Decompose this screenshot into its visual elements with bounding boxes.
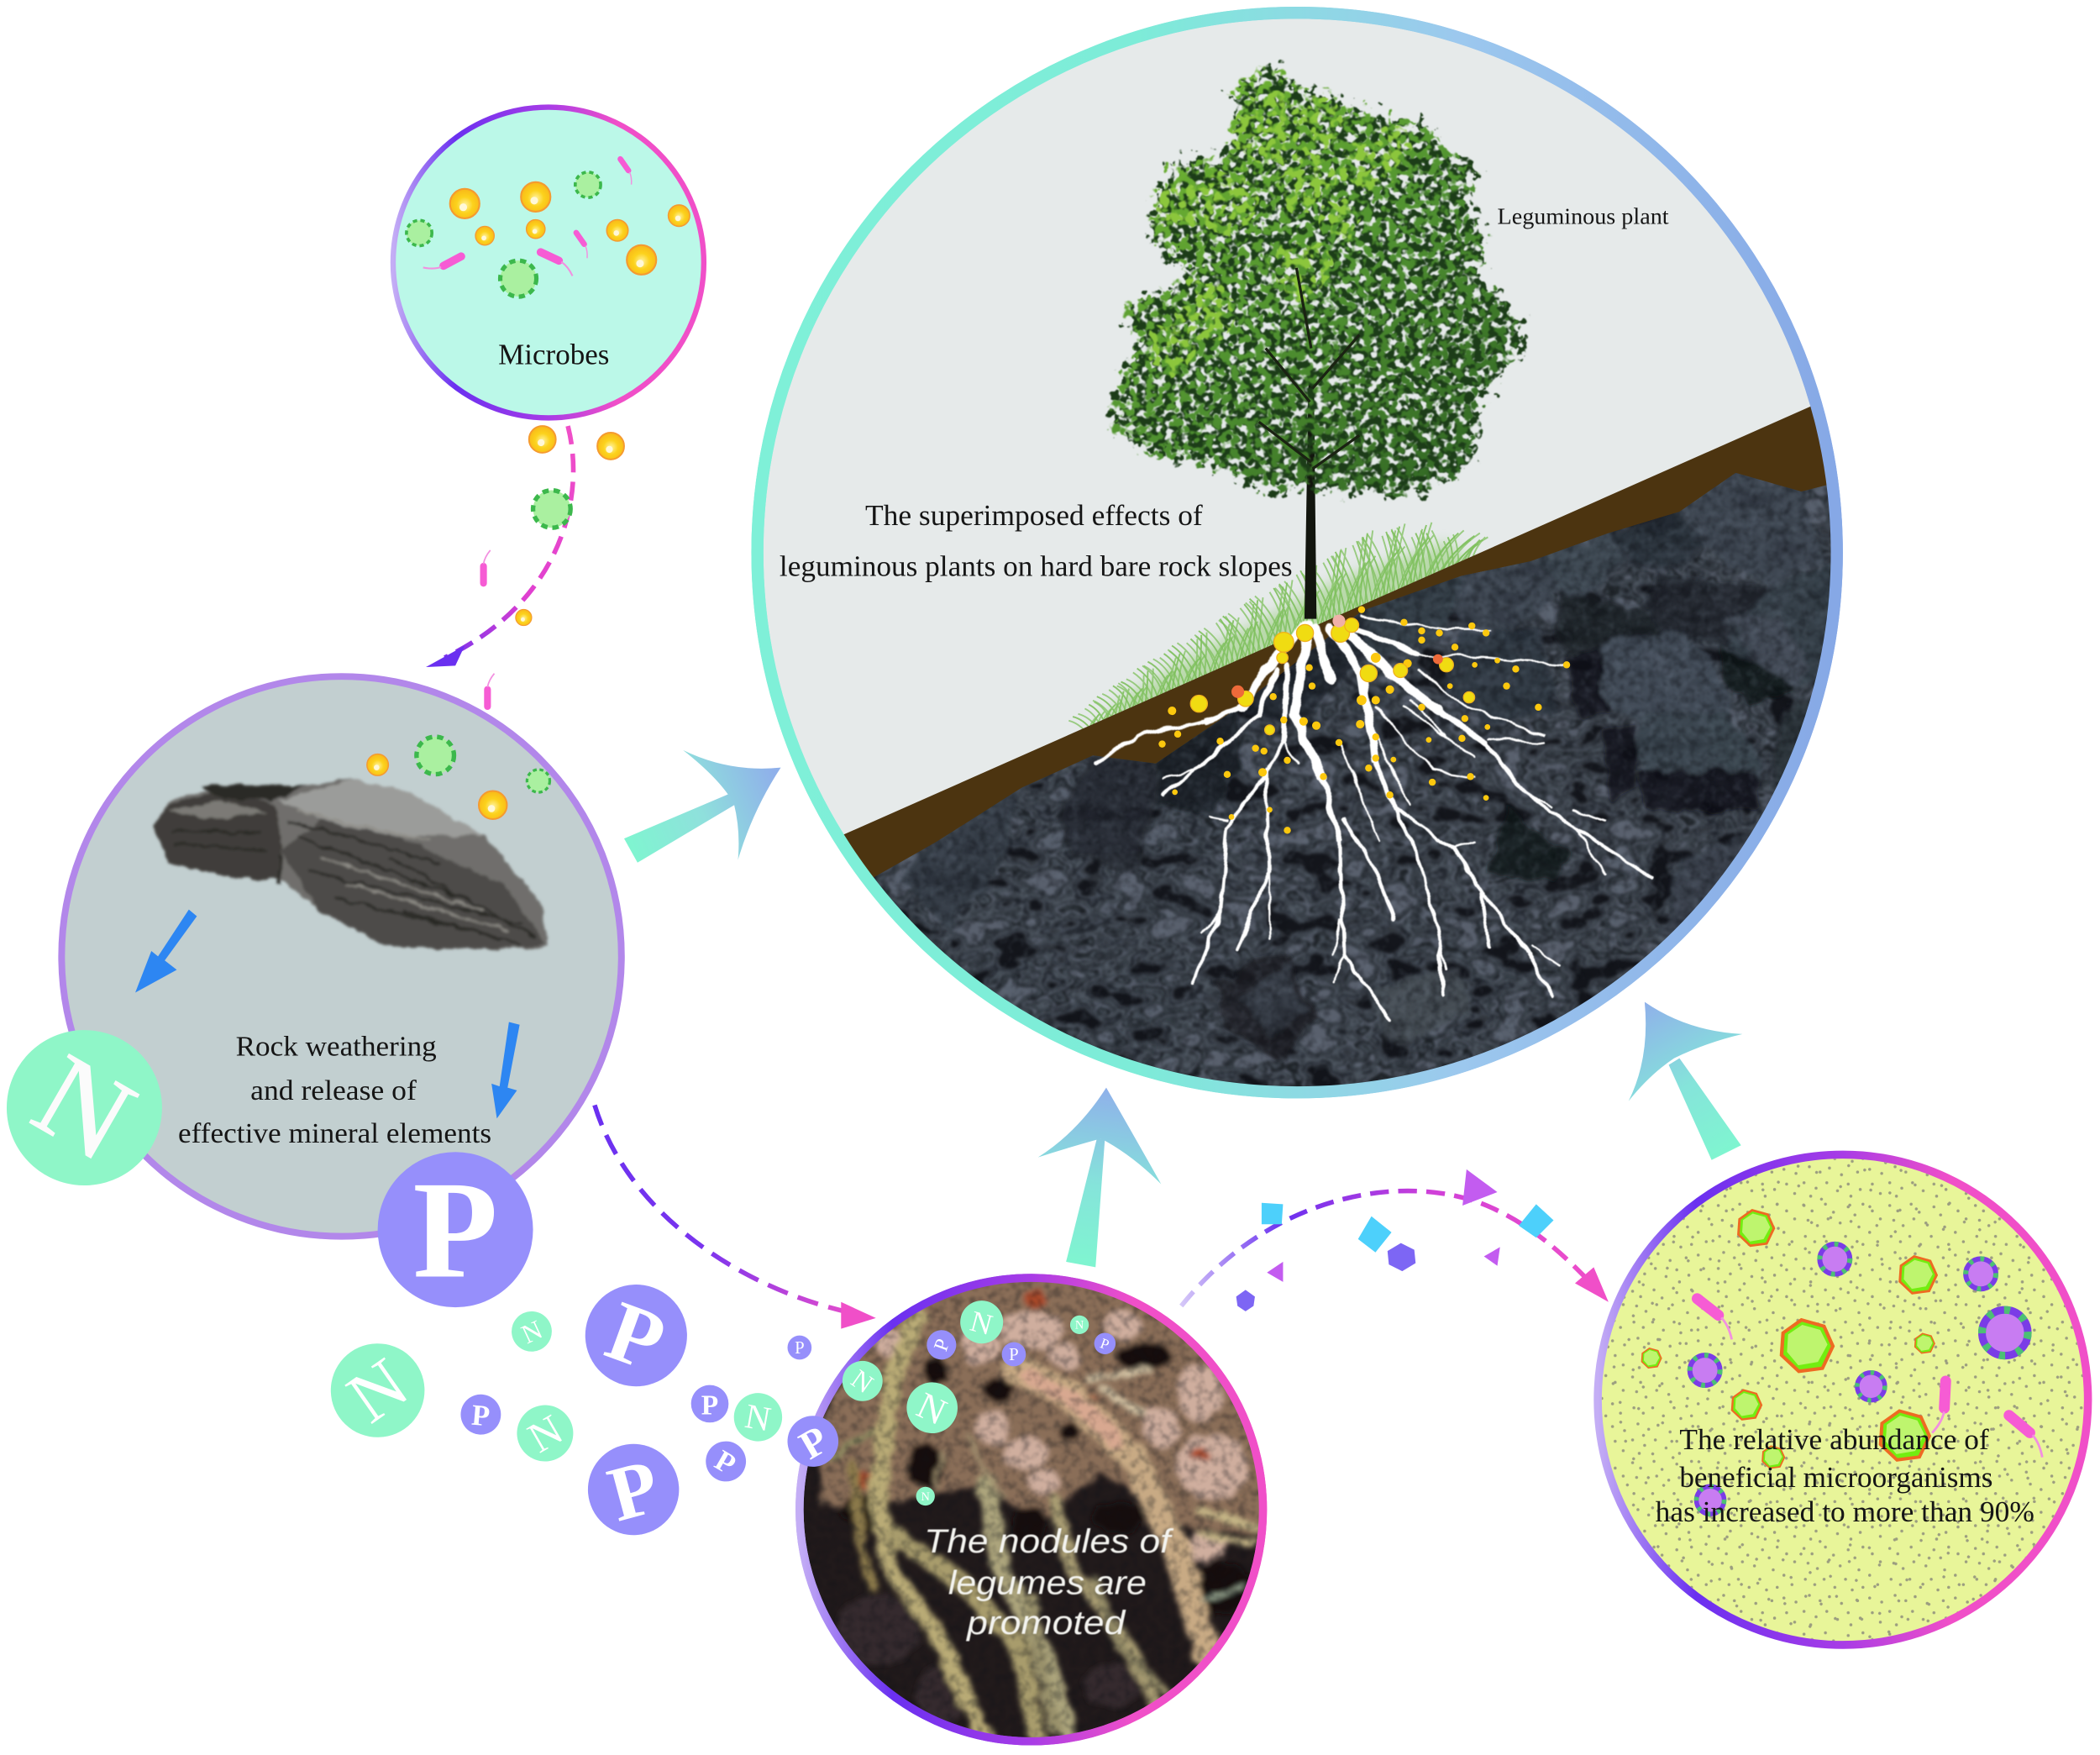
- label: rock weathering: Rock weathering: [236, 1031, 437, 1062]
- label: nodules promoted: [924, 1523, 1174, 1642]
- nutrient N medium: N: [521, 1406, 571, 1463]
- nodules photo texture: [820, 1276, 1270, 1742]
- label: relative abundance: has increased to more than 90%: [1656, 1495, 2034, 1528]
- nutrient P at nodule edge: P: [792, 1417, 836, 1469]
- heading: superimposed effects: The superimposed effects of: [865, 499, 1203, 532]
- heading: superimposed effects: [780, 499, 1293, 583]
- panel: rock weathering circle: [61, 676, 622, 1237]
- label: microbes: Microbes: [498, 339, 609, 371]
- nutrient N large: N: [333, 1343, 422, 1438]
- nutrient N large: [312, 1325, 443, 1456]
- floating N and P nutrients: [312, 1270, 1119, 1545]
- nutrient P in nodule right: P: [1009, 1346, 1019, 1364]
- nutrient N in nodule: N: [967, 1305, 996, 1342]
- nutrient P small: [459, 1393, 502, 1437]
- label: nodules promoted: The nodules of: [924, 1523, 1174, 1560]
- grass along the slope: [1068, 523, 1488, 734]
- nutrient P small mid: P: [701, 1390, 718, 1421]
- nutrient P small tilted: P: [710, 1443, 742, 1481]
- rock: released microbes: [367, 737, 549, 819]
- purple ringed microbes: [1690, 1244, 2028, 1514]
- arrow: dashed nodules to microorganisms: [1181, 1191, 1609, 1306]
- nutrient N at nodule edge: [834, 1353, 890, 1409]
- nutrient badge: phosphorus: P: [412, 1152, 498, 1306]
- nutrient P small tilted: [698, 1434, 753, 1489]
- panel: nodules photo circle: [797, 1273, 1270, 1748]
- arrow: nodules to main circle: [1038, 1088, 1161, 1267]
- nutrient N small: N: [517, 1315, 547, 1349]
- microbes: green cocci: [407, 172, 601, 297]
- soil band: [843, 407, 1826, 877]
- nutrient P large lower: P: [600, 1443, 668, 1538]
- label: relative abundance: [1656, 1423, 2034, 1528]
- nutrient P in nodule right: [1002, 1343, 1026, 1366]
- microbes: pink bacteria: [423, 155, 638, 278]
- nutrient N in nodule large: [898, 1374, 966, 1442]
- arrow: dashed rock to nodules: [595, 1105, 876, 1329]
- label: rock weathering: and release of: [250, 1075, 417, 1106]
- label: relative abundance: The relative abundance of: [1679, 1423, 1989, 1456]
- nutrient N tiny: [1070, 1316, 1089, 1334]
- arrow: dashed microbes to rock: [426, 426, 574, 667]
- nutrient P small: P: [470, 1399, 491, 1432]
- nutrient badge: nitrogen: [0, 1001, 191, 1214]
- transferred shapes: [1236, 1169, 1553, 1311]
- blue arrow: to nitrogen: [135, 910, 197, 992]
- blue arrow: to phosphorus: [491, 1022, 520, 1118]
- tree crown: [1113, 67, 1521, 491]
- nutrient N tiny lower: [916, 1487, 935, 1505]
- roots: [1096, 615, 1651, 1018]
- nutrient P tiny right: [1091, 1330, 1119, 1358]
- label: leguminous plant: Leguminous plant: [1498, 203, 1669, 229]
- panel: microbes circle: [393, 108, 704, 418]
- nutrient N mid: N: [743, 1396, 774, 1438]
- root nodule dots: [1158, 606, 1570, 834]
- nutrient P large lower: [578, 1434, 690, 1545]
- nutrient N at nodule edge: N: [846, 1364, 879, 1399]
- arrow: rock to main circle: [624, 750, 781, 863]
- nutrient P in nodule: [922, 1326, 960, 1364]
- nutrient P large: [571, 1270, 701, 1400]
- nutrient N in nodule large: N: [911, 1384, 953, 1433]
- green hexagonal microbes: [1641, 1209, 1938, 1469]
- nutrient P tiny right: P: [1098, 1334, 1111, 1353]
- nutrient P in nodule: P: [930, 1336, 954, 1354]
- nutrient P tiny: [788, 1336, 811, 1359]
- nutrient P at nodule edge: [778, 1406, 848, 1476]
- pink bacteria: [1686, 1291, 2053, 1458]
- nutrient N small: [505, 1305, 559, 1358]
- nutrient N medium: [507, 1395, 584, 1472]
- nutrient N in nodule: [955, 1295, 1008, 1348]
- heading: superimposed effects: leguminous plants on hard bare rock slopes: [780, 550, 1293, 583]
- nutrient N tiny: N: [1075, 1319, 1084, 1332]
- nutrient P tiny: P: [795, 1339, 805, 1358]
- label: relative abundance: beneficial microorganisms: [1679, 1461, 1992, 1494]
- nutrient N mid: [730, 1390, 786, 1445]
- label: rock weathering: effective mineral elements: [178, 1118, 491, 1149]
- label: nodules promoted: legumes are: [948, 1564, 1147, 1601]
- microbes: yellow bubbles: [450, 182, 690, 275]
- nutrient P large: P: [595, 1283, 676, 1390]
- large root nodules: [1190, 618, 1475, 735]
- label: nodules promoted: promoted: [966, 1605, 1126, 1642]
- tree trunk: [1305, 381, 1316, 619]
- panel: main slope circle: [750, 13, 1848, 1111]
- nutrient badge: phosphorus: [378, 1152, 533, 1307]
- rock slope: [874, 473, 1831, 1087]
- falling microbes: [480, 426, 624, 710]
- rock image: [154, 778, 549, 949]
- nutrient P small mid: [691, 1385, 728, 1422]
- panel: beneficial microorganisms circle: [1598, 1154, 2088, 1645]
- arrow: microorganisms to main circle: [1629, 1002, 1742, 1160]
- nutrient badge: nitrogen: N: [13, 1028, 155, 1188]
- label: rock weathering: [178, 1031, 491, 1149]
- nutrient N tiny lower: N: [921, 1490, 931, 1504]
